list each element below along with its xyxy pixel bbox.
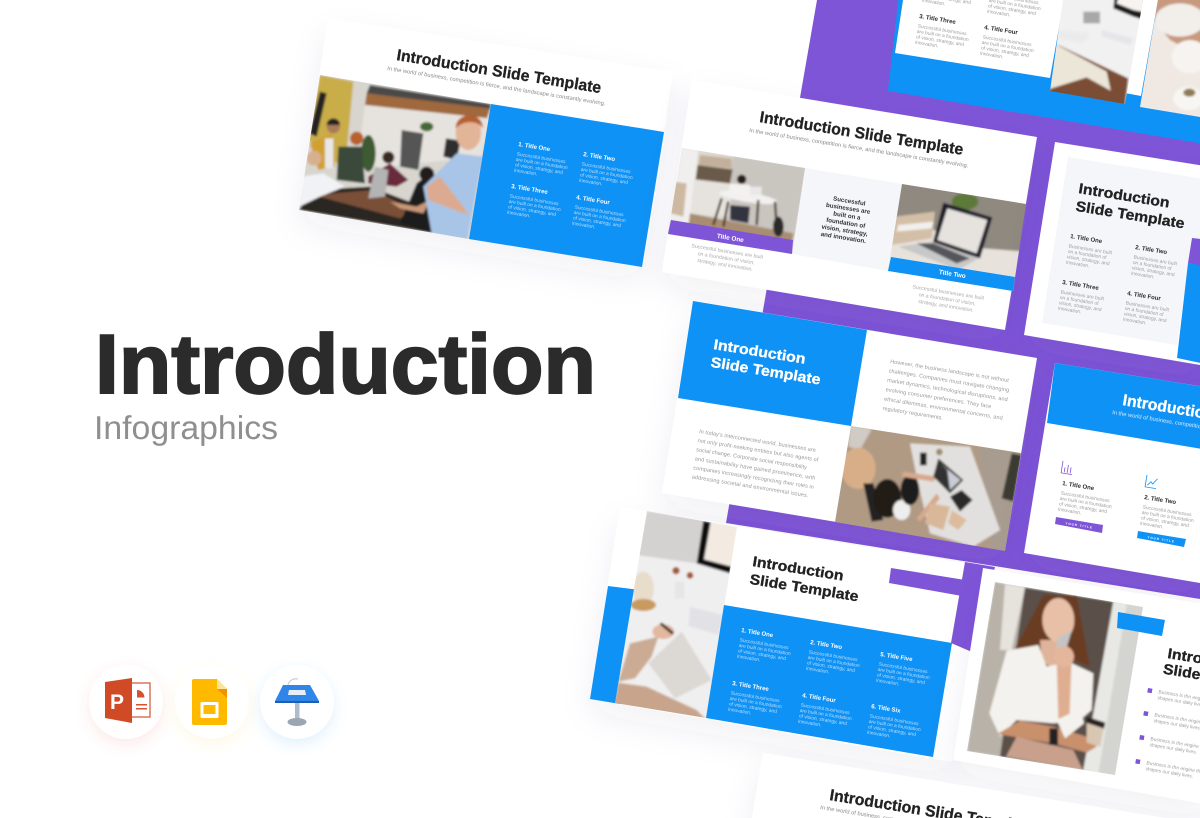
left paragraph: not only profit-seeking entities but also agents of — [697, 438, 819, 464]
left paragraph: companies increasingly recognizing their roles in — [693, 465, 814, 491]
slide: two photos with center statement — [662, 80, 1037, 330]
left paragraph: In today's interconnected world, businesses are — [699, 429, 816, 454]
item: title six: are built on a foundation — [868, 719, 921, 733]
item: title two: are built on a foundation — [807, 655, 860, 669]
center statement — [820, 194, 873, 245]
item: title four: Successful businesses — [982, 34, 1033, 48]
slide heading — [1074, 181, 1189, 232]
slide 4 heading — [748, 554, 863, 605]
item: title two: 2. Title Two — [810, 639, 843, 651]
bullet four: shapes our daily lives. — [1145, 766, 1193, 780]
item: title two: innovation. — [987, 9, 1011, 18]
item: title two: innovation. — [1140, 521, 1164, 530]
item: title four: 4. Title Four — [576, 194, 611, 206]
right paragraph: challenges. Companies must navigate changing — [888, 368, 1010, 394]
slide 1 title: Introduction Slide Template — [395, 47, 603, 97]
purple strip — [889, 568, 965, 596]
item: title one: Successful businesses — [739, 637, 790, 651]
slide 8 background — [953, 568, 1200, 805]
caption text one: strategy, and innovation. — [697, 258, 753, 273]
item: title three: 3. Title Three — [919, 13, 957, 26]
item: title one: innovation. — [737, 654, 761, 663]
item: title two — [1131, 244, 1180, 284]
center statement: businesses are — [825, 202, 871, 216]
item: title one: are built on a foundation — [515, 157, 568, 171]
blue left block — [590, 586, 640, 704]
item: title three: Successful businesses — [917, 23, 968, 37]
item: title four: Successful businesses — [800, 702, 851, 716]
icon: growth chart — [1145, 475, 1158, 489]
item: title one: Businesses are built — [1068, 243, 1113, 256]
photo: woman with coffee — [967, 582, 1143, 775]
purple corner — [1188, 238, 1200, 268]
item: title one: innovation. — [1066, 260, 1090, 269]
item: title two: Successful businesses — [1142, 504, 1193, 518]
item: title two: innovation. — [806, 666, 830, 675]
item: title one: on a foundation of — [1067, 249, 1108, 261]
slide heading: Introduction — [1077, 181, 1171, 212]
item: title two: of vision, strategy, and — [579, 172, 629, 186]
bullet three — [1138, 735, 1200, 758]
photo: overhead laptop desk — [835, 426, 1021, 551]
item: title four: 4. Title Four — [802, 692, 837, 704]
bullet three: shapes our daily lives. — [1149, 742, 1197, 756]
item: title one: Successful businesses — [1060, 490, 1111, 504]
item: title three: Successful businesses — [509, 193, 560, 207]
right paragraph: However, the business landscape is not without — [890, 359, 1010, 384]
item: title one — [1058, 480, 1115, 521]
slide 1 blue panel — [469, 104, 664, 267]
item: title two: innovation. — [1131, 271, 1155, 280]
left paragraph: and sustainability have gained prominence, with — [694, 456, 816, 482]
main heading: Introduction — [95, 317, 596, 411]
slide 3 heading — [709, 337, 824, 388]
icon: Google Slides — [175, 665, 249, 739]
slide 4 heading: Introduction — [751, 554, 845, 585]
slide: bottom cut off — [750, 753, 1200, 818]
item: title four: are built on a foundation — [799, 708, 852, 722]
item: title three — [507, 183, 564, 224]
item: title two: Businesses are built — [1133, 254, 1178, 267]
item: title one — [514, 141, 571, 182]
item: title one: are built on a foundation — [1059, 496, 1112, 510]
right paragraph: evolving consumer preferences. They face — [885, 387, 992, 410]
item: title two — [987, 0, 1044, 23]
gray center panel — [792, 168, 902, 271]
item: title three: of vision, strategy, and — [915, 34, 965, 48]
caption title one: Title One — [716, 233, 745, 244]
right paragraph: market dynamics, technological disruptions, and — [887, 378, 1008, 403]
item: title two: vision, strategy, and — [1131, 265, 1175, 278]
photo: laptop — [888, 184, 1026, 291]
item: title four: innovation. — [572, 221, 596, 230]
item: title four: are built on a foundation — [981, 40, 1034, 54]
slide 4 heading: Slide Template — [748, 572, 860, 605]
purple background band — [726, 0, 1200, 615]
item: title six: innovation. — [867, 730, 891, 739]
item: title two: of vision, strategy, and — [1140, 515, 1190, 529]
item: title six: of vision, strategy, and — [867, 724, 917, 738]
item: title four: on a foundation of — [1124, 306, 1165, 318]
photo: white desk — [1050, 0, 1143, 104]
item: title three: are built on a foundation — [729, 696, 782, 710]
item: title four: innovation. — [1123, 317, 1147, 326]
item: title one: of vision, strategy, and — [737, 648, 787, 662]
item: title three: Successful businesses — [730, 690, 781, 704]
item: title five: Successful businesses — [878, 661, 929, 675]
left paragraph — [691, 429, 821, 500]
caption text one: on a foundation of vision, — [697, 251, 755, 266]
item: title five: of vision, strategy, and — [876, 672, 926, 686]
item: title four: innovation. — [798, 719, 822, 728]
item: title six: Successful businesses — [869, 713, 920, 727]
caption text one: Successful businesses are built — [691, 243, 764, 261]
item: title three — [1058, 279, 1107, 319]
item: title three: are built on a foundation — [916, 29, 969, 43]
white panel of top right slide — [895, 0, 1064, 78]
item: title three: are built on a foundation — [508, 199, 561, 213]
item: title three: of vision, strategy, and — [507, 204, 557, 218]
center statement: Successful — [833, 195, 866, 208]
bullet two — [1142, 711, 1200, 734]
item: title one: innovation. — [1058, 507, 1082, 516]
bullet two: shapes our daily lives. — [1153, 718, 1200, 732]
slide 6 background — [1024, 142, 1200, 365]
slide: gray panel four titles — [1024, 142, 1200, 365]
slide 3 heading: Introduction — [712, 337, 807, 368]
item: title three: 3. Title Three — [732, 680, 770, 693]
purple button — [1055, 517, 1103, 533]
bullet one — [1146, 688, 1200, 711]
icon: Keynote — [260, 665, 334, 739]
item: title five — [876, 651, 933, 692]
item: title four: of vision, strategy, and — [798, 713, 848, 727]
slide 1 subtitle: In the world of business, competition is fierce, and the landscape is constantly evolving. — [387, 65, 606, 107]
item: title one — [737, 627, 794, 668]
slide: blue header two column text — [662, 301, 1037, 557]
slide: team photo with four titles — [297, 18, 673, 267]
item: title two: Successful businesses — [581, 161, 632, 175]
item: title two: of vision, strategy, and — [987, 3, 1037, 17]
item: title four — [798, 692, 855, 733]
slide 9 background — [750, 753, 1200, 818]
item: title three — [915, 13, 972, 54]
item: title one: of vision, strategy, and — [1058, 501, 1108, 515]
item: title two: 2. Title Two — [1135, 244, 1168, 256]
item: title three: Businesses are built — [1060, 289, 1105, 302]
item: title four — [1123, 290, 1172, 330]
slide 3 blue panel — [678, 301, 867, 426]
item: title four: 4. Title Four — [1127, 290, 1162, 302]
blue caption bar — [888, 257, 1015, 291]
item: title three: 3. Title Three — [1062, 279, 1100, 292]
caption text two: strategy, and innovation. — [918, 299, 974, 314]
item: title one — [922, 0, 979, 12]
item: title six — [867, 703, 924, 744]
blue button — [1137, 531, 1186, 547]
item: title one: 1. Title One — [1070, 233, 1103, 245]
icon: bar chart — [1061, 461, 1074, 475]
item: title two: of vision, strategy, and — [806, 660, 856, 674]
item: title two — [579, 151, 636, 192]
item: title four: vision, strategy, and — [1123, 311, 1167, 324]
left paragraph: social change. Corporate social responsibility — [696, 447, 808, 471]
item: title four: Successful businesses — [574, 204, 625, 218]
slide: blue header with icons — [1024, 363, 1200, 583]
bullet four — [1134, 759, 1200, 782]
photo: writing at white desk — [615, 511, 737, 718]
slide 2 title: Introduction Slide Template — [758, 109, 965, 159]
slide 2 background — [662, 80, 1037, 330]
item: title one: 1. Title One — [518, 141, 551, 153]
slide 4 background — [590, 507, 970, 762]
caption text two: Successful businesses are built — [912, 284, 985, 302]
photo: woman at desk — [668, 148, 805, 254]
item: title four: Businesses are built — [1125, 300, 1170, 313]
item: title three: innovation. — [915, 40, 939, 49]
slide heading: Slide Template — [1074, 199, 1186, 232]
item: title one: are built on a foundation — [738, 643, 791, 657]
slide 8 heading — [1162, 646, 1200, 695]
item: title one — [1066, 233, 1115, 273]
icon: PowerPoint — [89, 665, 163, 739]
icon: PowerPoint: P — [110, 691, 124, 714]
sub heading: Infographics — [94, 409, 278, 446]
item: title one: 1. Title One — [741, 627, 774, 639]
slide 2 subtitle: In the world of business, competition is fierce, and the landscape is constantly evolving. — [749, 127, 969, 170]
purple column — [951, 562, 995, 652]
item: title four: of vision, strategy, and — [572, 215, 622, 229]
slide 7 background — [1024, 363, 1200, 583]
slide 3 background — [662, 301, 1037, 550]
item: title two: on a foundation of — [1132, 260, 1173, 272]
blue accent block — [1117, 612, 1165, 636]
item: title three: of vision, strategy, and — [728, 701, 778, 715]
item: title one: of vision, strategy, and — [514, 162, 564, 176]
left paragraph: addressing societal and environmental issues. — [691, 474, 809, 499]
item: title two: are built on a foundation — [580, 167, 633, 181]
center statement: and innovation. — [820, 231, 867, 245]
item: title one: 1. Title One — [1062, 480, 1095, 492]
slide: top right cut off — [888, 0, 1200, 144]
item: title four — [572, 194, 629, 235]
blue corner — [1177, 263, 1200, 365]
blue button: YOUR TITLE — [1147, 535, 1175, 544]
item: title five: 5. Title Five — [880, 651, 914, 663]
item: title three: 3. Title Three — [511, 183, 549, 196]
item: title two — [1140, 494, 1197, 535]
item: title four: 4. Title Four — [984, 24, 1019, 36]
slide 3 heading: Slide Template — [709, 355, 822, 388]
slide: six titles — [590, 505, 995, 762]
item: title five: innovation. — [876, 678, 900, 687]
slide: woman on phone — [953, 568, 1200, 805]
slide 7 blue header — [1047, 363, 1200, 452]
purple button: YOUR TITLE — [1065, 521, 1093, 530]
right paragraph: ethical dilemmas, environmental concerns, and — [884, 397, 1003, 422]
right paragraph: regulatory requirements. — [882, 406, 944, 422]
item: title five: are built on a foundation — [877, 667, 930, 681]
item: title three: innovation. — [728, 707, 752, 716]
purple caption bar — [668, 220, 793, 254]
photo: bowls — [1137, 0, 1200, 120]
caption text two — [910, 284, 985, 315]
item: title two: innovation. — [579, 178, 603, 187]
item: title four: innovation. — [980, 51, 1004, 60]
center statement: vision, strategy, — [821, 224, 868, 238]
item: title three — [728, 680, 785, 721]
item: title two — [806, 639, 863, 680]
item: title one: vision, strategy, and — [1066, 254, 1110, 267]
slide 1 background — [299, 18, 673, 267]
item: title two: are built on a foundation — [1141, 510, 1194, 524]
item: title four: are built on a foundation — [573, 210, 626, 224]
item: title four — [980, 24, 1037, 65]
caption text one — [689, 243, 764, 274]
item: title three: vision, strategy, and — [1058, 300, 1102, 313]
item: title two: 2. Title Two — [1144, 494, 1177, 506]
item: title two: Successful businesses — [808, 649, 859, 663]
item: title one: Successful businesses — [516, 151, 567, 165]
item: title three: innovation. — [507, 210, 531, 219]
photo: team at table — [297, 73, 497, 243]
gray panel — [1042, 157, 1200, 345]
blue base of top right slide — [888, 0, 1200, 160]
caption title two: Title Two — [938, 269, 966, 280]
right paragraph — [882, 359, 1011, 431]
item: title six: 6. Title Six — [871, 703, 902, 715]
center statement: foundation of — [826, 217, 867, 230]
item: title one: innovation. — [514, 168, 538, 177]
center statement: built on a — [833, 210, 862, 222]
slide 4 blue panel — [706, 605, 952, 757]
caption text two: on a foundation of vision, — [918, 292, 976, 307]
item: title two: 2. Title Two — [583, 151, 616, 163]
white strip — [1125, 0, 1158, 96]
item: title three: on a foundation of — [1059, 295, 1100, 307]
item: title three: innovation. — [1058, 306, 1082, 315]
item: title four: of vision, strategy, and — [980, 45, 1030, 59]
